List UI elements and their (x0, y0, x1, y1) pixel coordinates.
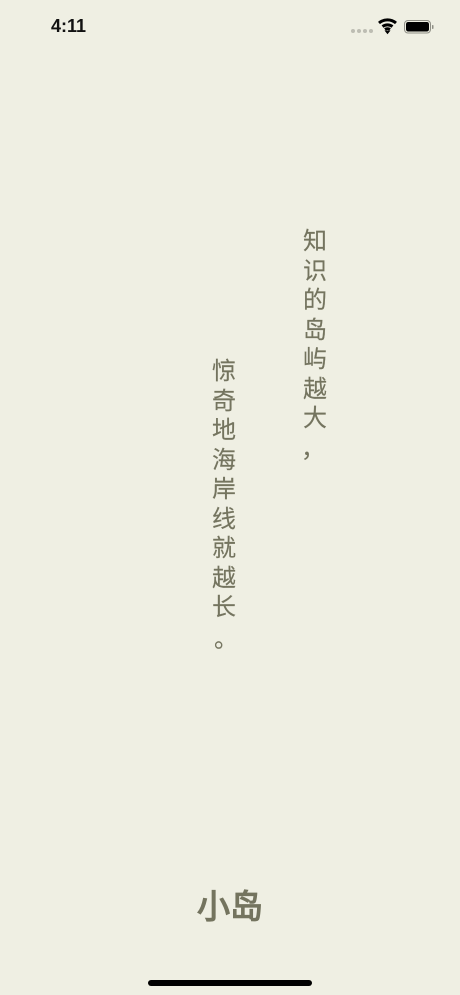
status bar time: 4:11 (51, 16, 86, 36)
vertical text: first column (301, 228, 327, 462)
vertical text: second column: 线 (212, 506, 236, 532)
icon: battery (404, 20, 434, 33)
vertical text: second column: 奇 (212, 388, 236, 414)
vertical text: second column (212, 358, 238, 652)
vertical text: second column: 惊 (212, 358, 236, 385)
vertical text: second column: 地 (212, 417, 236, 444)
vertical text: second column: 。 (214, 626, 238, 652)
icon: wifi (379, 20, 396, 34)
vertical text: first column: 屿 (303, 346, 327, 373)
vertical text: first column: 大 (303, 405, 327, 432)
vertical text: second column: 就 (212, 535, 236, 562)
vertical text: first column: 知 (303, 228, 327, 255)
vertical text: first column: 越 (303, 376, 327, 402)
app name: 小岛 (197, 888, 263, 925)
vertical text: first column: 岛 (303, 316, 327, 344)
vertical text: first column: ， (301, 436, 325, 462)
home indicator (148, 980, 312, 986)
status bar icons (351, 18, 434, 34)
vertical text: second column: 海 (212, 446, 236, 474)
vertical text: second column: 越 (212, 564, 236, 592)
vertical text: second column: 长 (212, 594, 236, 621)
icon: signal dots (351, 29, 373, 33)
vertical text: first column: 的 (303, 287, 327, 314)
vertical text: first column: 识 (303, 258, 327, 284)
vertical text: second column: 岸 (212, 476, 236, 503)
